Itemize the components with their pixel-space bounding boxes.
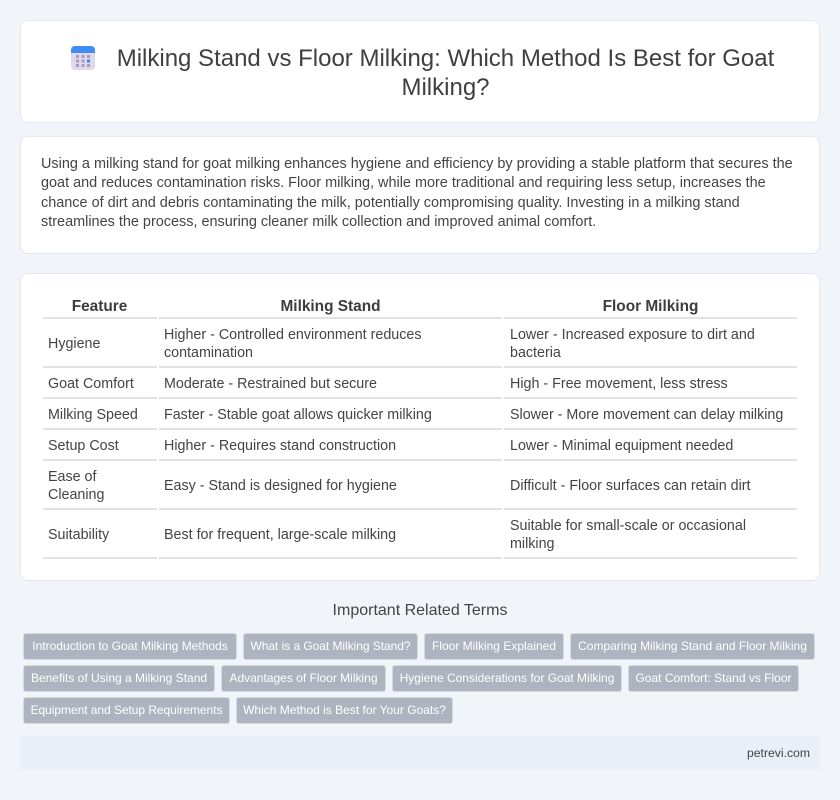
table header: Floor Milking: Floor Milking bbox=[603, 298, 698, 315]
row: Ease of Cleaning: Cleaning bbox=[48, 487, 104, 503]
tag: Floor Milking Explained bbox=[432, 639, 556, 653]
intro text: Using a milking stand for goat milking enhances hygiene and efficiency by providing a stable platform that secures the bbox=[41, 156, 793, 172]
title bbox=[117, 45, 774, 101]
comparison table: Moderate - Restrained but secure bbox=[164, 376, 377, 392]
comparison table: milking bbox=[510, 536, 554, 552]
tag: Hygiene Considerations for Goat Milking bbox=[400, 671, 614, 685]
comparison table: Best for frequent, large-scale milking bbox=[164, 527, 396, 543]
tag bbox=[23, 697, 230, 724]
table header: Feature: Feature bbox=[72, 298, 127, 315]
header panel bbox=[20, 20, 820, 123]
comparison table: Higher - Controlled environment reduces bbox=[164, 327, 421, 343]
title: Milking? bbox=[401, 74, 490, 101]
tag: Equipment and Setup Requirements bbox=[31, 703, 222, 717]
row: Ease of Cleaning bbox=[48, 469, 104, 503]
tag bbox=[392, 665, 622, 692]
intro text: streamlines the process, ensuring cleaner milk collection and improved animal comfort. bbox=[41, 214, 596, 230]
comparison table: Easy - Stand is designed for hygiene bbox=[164, 478, 397, 494]
related terms tags bbox=[23, 633, 815, 724]
tag: Goat Comfort: Stand vs Floor bbox=[635, 671, 792, 685]
intro text bbox=[41, 156, 793, 230]
comparison table: Difficult - Floor surfaces can retain dirt bbox=[510, 478, 750, 494]
row: Hygiene: Hygiene bbox=[48, 336, 100, 352]
tag bbox=[570, 633, 815, 660]
intro text: goat and reduces contamination risks. Floor milking, while more traditional and requiring less setup, increases the bbox=[41, 175, 766, 191]
row: Suitability: Suitability bbox=[48, 527, 109, 543]
tag bbox=[243, 633, 418, 660]
tag bbox=[23, 633, 237, 660]
comparison table: High - Free movement, less stress bbox=[510, 376, 728, 392]
footer source: petrevi.com bbox=[747, 746, 810, 760]
title: Milking Stand vs Floor Milking: Which Method Is Best for Goat bbox=[117, 45, 774, 72]
tag: Benefits of Using a Milking Stand bbox=[31, 671, 207, 685]
tag: Introduction to Goat Milking Methods bbox=[32, 639, 228, 653]
comparison table: Lower - Minimal equipment needed bbox=[510, 438, 733, 454]
comparison table: bacteria bbox=[510, 345, 561, 361]
comparison table: Lower - Increased exposure to dirt and bbox=[510, 327, 755, 343]
row: Milking Speed: Milking Speed bbox=[48, 407, 138, 423]
comparison table bbox=[43, 298, 797, 559]
tag: What is a Goat Milking Stand? bbox=[251, 639, 410, 653]
table header: Milking Stand: Milking Stand bbox=[280, 298, 381, 315]
comparison table: contamination bbox=[164, 345, 253, 361]
comparison table: Faster - Stable goat allows quicker milking bbox=[164, 407, 432, 423]
tag bbox=[236, 697, 453, 724]
tag bbox=[628, 665, 799, 692]
intro text: chance of dirt and debris contaminating the milk, potentially compromising quality. Investing in a milking stand bbox=[41, 195, 740, 211]
row: Ease of Cleaning: Ease of bbox=[48, 469, 96, 485]
icon: calendar grid bbox=[71, 46, 95, 70]
intro panel bbox=[20, 136, 820, 254]
comparison table: Higher - Requires stand construction bbox=[164, 438, 396, 454]
row: Goat Comfort: Goat Comfort bbox=[48, 376, 134, 392]
comparison table: Suitable for small-scale or occasional bbox=[510, 518, 746, 534]
row: Setup Cost: Setup Cost bbox=[48, 438, 119, 454]
tag: Advantages of Floor Milking bbox=[229, 671, 378, 685]
tag: Comparing Milking Stand and Floor Milking bbox=[578, 639, 807, 653]
tag bbox=[23, 665, 215, 692]
footer bar bbox=[20, 736, 820, 770]
comparison table: Slower - More movement can delay milking bbox=[510, 407, 783, 423]
tag bbox=[424, 633, 564, 660]
tag bbox=[221, 665, 386, 692]
related terms heading: Important Related Terms bbox=[333, 602, 507, 619]
tag: Which Method is Best for Your Goats? bbox=[243, 703, 446, 717]
comparison table panel bbox=[20, 273, 820, 581]
